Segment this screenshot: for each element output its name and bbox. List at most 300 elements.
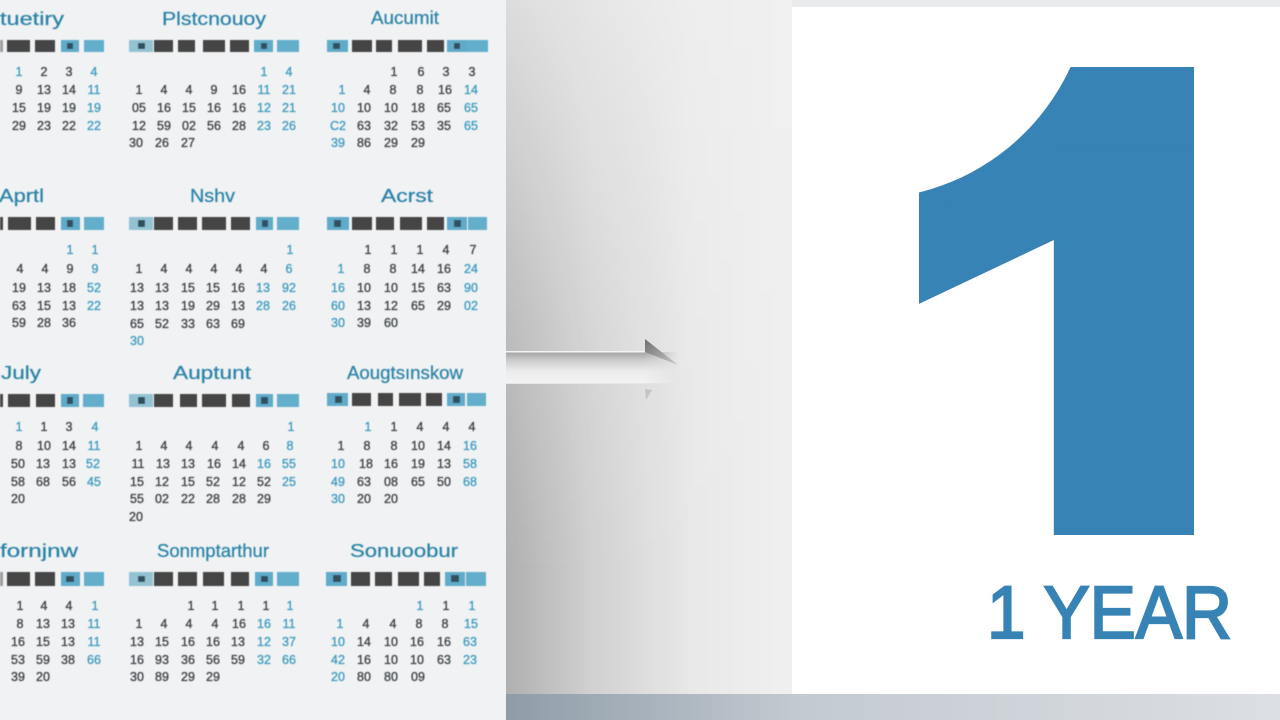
month: row 3 column 1: 1 xyxy=(41,420,48,434)
month: row 4 column 2: 29 xyxy=(181,670,195,684)
month: row 1 column 3: 39 xyxy=(331,136,345,150)
month: row 2 column 2: 4 xyxy=(211,262,218,276)
month: row 1 column 2: 26 xyxy=(282,119,296,133)
month: row 3 column 1: 8 xyxy=(16,439,23,453)
month: row 2 column 3: 10 xyxy=(357,281,371,295)
month: row 3 column 1: 10 xyxy=(37,439,51,453)
month: row 3 column 2: 16 xyxy=(207,457,221,471)
month: row 4 column 3: 4 xyxy=(363,617,370,631)
month: row 1 column 3: 32 xyxy=(384,119,398,133)
month: row 4 column 2: 1 xyxy=(287,599,294,613)
month: row 3 column 3: 8 xyxy=(364,439,371,453)
month: row 1 column 3: 18 xyxy=(411,101,425,115)
month: row 1 column 3: 3 xyxy=(469,65,476,79)
panel: floor strip xyxy=(506,694,1280,720)
month: row 4 column 1: 15 xyxy=(36,635,50,649)
month: row 2 column 1: 9 xyxy=(67,262,74,276)
month: row 1 column 1: 1 xyxy=(16,65,23,79)
month: row 4 column 2 xyxy=(129,541,299,684)
month: row 4 column 2: 36 xyxy=(181,653,195,667)
month: row 2 column 3: 14 xyxy=(411,262,425,276)
month: row 3 column 3: 20 xyxy=(357,492,371,506)
month: row 1 column 1: 19 xyxy=(37,101,51,115)
month: row 2 column 2: 15 xyxy=(206,281,220,295)
month: row 4 column 2: 1 xyxy=(212,599,219,613)
month: row 2 column 3: 13 xyxy=(357,299,371,313)
month: row 2 column 1: 13 xyxy=(62,299,76,313)
month: row 2 column 2: 13 xyxy=(256,281,270,295)
month: row 1 column 1: 29 xyxy=(12,119,26,133)
month: row 2 column 2: 4 xyxy=(236,262,243,276)
month: row 4 column 3: 20 xyxy=(331,670,345,684)
month: row 4 column 2: 1 xyxy=(238,599,245,613)
month: row 1 column 1: 15 xyxy=(12,101,26,115)
month: row 2 column 3: 4 xyxy=(443,243,450,257)
month: row 3 column 3: 30 xyxy=(331,492,345,506)
month: row 4 column 2: 4 xyxy=(186,617,193,631)
month: row 4 column 1: 11 xyxy=(88,617,101,631)
month: row 4 column 1: 4 xyxy=(41,599,48,613)
month: row 4 column 2: 93 xyxy=(155,653,169,667)
month: row 4 column 2: 32 xyxy=(257,653,271,667)
month: row 1 column 3: 35 xyxy=(437,119,451,133)
month: row 4 column 2: 37 xyxy=(282,635,296,649)
month: row 1 column 1: 3 xyxy=(66,65,73,79)
month: row 2 column 2: 13 xyxy=(155,299,169,313)
month: row 1 column 3: 63 xyxy=(357,119,371,133)
month: row 4 column 2: 13 xyxy=(231,635,245,649)
month: row 1 column 2: 12 xyxy=(132,119,146,133)
month: row 1 column 2: 16 xyxy=(232,101,246,115)
month: row 2 column 3: 1 xyxy=(338,262,345,276)
month: row 4 column 2: 15 xyxy=(155,635,169,649)
month: row 1 column 2: 16 xyxy=(157,101,171,115)
month: row 1 column 2: 23 xyxy=(257,119,271,133)
month: row 2 column 3: 65 xyxy=(411,299,425,313)
month: row 2 column 2: 4 xyxy=(161,262,168,276)
month: row 4 column 1: 4 xyxy=(66,599,73,613)
month: row 1 column 3: 53 xyxy=(411,119,425,133)
month: row 4 column 3: 10 xyxy=(331,635,345,649)
month: row 2 column 3: 63 xyxy=(437,281,451,295)
month: row 4 column 1: 13 xyxy=(61,617,75,631)
month: row 1 column 2: 16 xyxy=(232,83,246,97)
month: row 1 column 3: 1 xyxy=(339,83,346,97)
month: row 1 column 1: 23 xyxy=(37,119,51,133)
month: row 4 column 3: 80 xyxy=(357,670,371,684)
month: row 3 column 3: Aougtsınskow xyxy=(347,363,464,383)
month: row 1 column 1: 13 xyxy=(37,83,51,97)
month: row 1 column 1: 22 xyxy=(62,119,76,133)
month: row 3 column 1: 13 xyxy=(36,457,50,471)
month: row 2 column 2: 19 xyxy=(181,299,195,313)
month: row 3 column 2: 20 xyxy=(129,510,143,524)
month: row 1 column 2: 21 xyxy=(282,101,296,115)
month: row 4 column 2: 16 xyxy=(181,635,195,649)
month: row 3 column 3: 4 xyxy=(417,420,424,434)
month: row 1 column 2: 21 xyxy=(282,83,296,97)
month: row 3 column 2: 8 xyxy=(287,439,294,453)
month: row 4 column 1: fornjnw xyxy=(0,541,79,561)
month: row 3 column 2: 25 xyxy=(282,475,296,489)
month: row 3 column 3: 4 xyxy=(443,420,450,434)
month: row 3 column 1: 11 xyxy=(88,439,101,453)
month: row 1 column 3: 65 xyxy=(437,101,451,115)
month: row 4 column 3: 16 xyxy=(357,653,371,667)
month: row 1 column 3: 65 xyxy=(464,101,478,115)
month: row 4 column 2: 30 xyxy=(130,670,144,684)
month: row 4 column 2: 1 xyxy=(136,617,143,631)
month: row 1 column 3: 65 xyxy=(464,119,478,133)
month: row 1 column 2: 16 xyxy=(207,101,221,115)
month: row 1 column 2: 1 xyxy=(261,65,268,79)
month: row 3 column 3: 10 xyxy=(411,439,425,453)
month: row 2 column 1: 63 xyxy=(12,299,26,313)
month: row 4 column 3: 09 xyxy=(411,670,425,684)
month: row 3 column 2: 12 xyxy=(155,475,169,489)
month: row 2 column 3: 02 xyxy=(464,299,478,313)
month: row 3 column 2: 15 xyxy=(130,475,144,489)
month: row 1 column 2: 30 xyxy=(129,136,143,150)
month: row 1 column 2: 4 xyxy=(161,83,168,97)
month: row 4 column 2: 1 xyxy=(188,599,195,613)
month: row 3 column 2: 55 xyxy=(282,457,296,471)
month: row 2 column 3: 16 xyxy=(331,281,345,295)
month: row 1 column 2: 59 xyxy=(157,119,171,133)
month: row 3 column 1: 20 xyxy=(11,492,25,506)
month: row 2 column 3: 12 xyxy=(384,299,398,313)
month: row 1 column 2: 4 xyxy=(286,65,293,79)
month: row 2 column 2: Nshv xyxy=(190,186,235,206)
month: row 3 column 2: 1 xyxy=(288,420,295,434)
month: row 3 column 1: 50 xyxy=(11,457,25,471)
month: row 3 column 1: 68 xyxy=(36,475,50,489)
month: row 2 column 3: 1 xyxy=(391,243,398,257)
month: row 2 column 1: 22 xyxy=(87,299,101,313)
month: row 4 column 3: 10 xyxy=(410,653,424,667)
month: row 4 column 3: 15 xyxy=(464,617,478,631)
month: row 2 column 1: 4 xyxy=(17,262,24,276)
month: row 4 column 2: 16 xyxy=(130,653,144,667)
month: row 3 column 3: 10 xyxy=(331,457,345,471)
panel: calendar sheet xyxy=(0,0,506,720)
month: row 1 column 1: 22 xyxy=(87,119,101,133)
month: row 2 column 3 xyxy=(327,186,487,330)
month: row 4 column 3: Sonuoobur xyxy=(350,541,458,561)
month: row 3 column 2: 12 xyxy=(232,475,246,489)
month: row 2 column 3: 8 xyxy=(364,262,371,276)
month: row 4 column 1: 53 xyxy=(11,653,25,667)
month: row 1 column 3: 10 xyxy=(331,101,345,115)
month: row 2 column 2: 69 xyxy=(231,317,245,331)
month: row 2 column 1: 36 xyxy=(62,316,76,330)
month: row 4 column 1: 13 xyxy=(36,617,50,631)
month: row 2 column 2: 4 xyxy=(186,262,193,276)
month: row 4 column 1: 20 xyxy=(36,670,50,684)
month: row 1 column 3: 10 xyxy=(357,101,371,115)
month: row 3 column 1 xyxy=(0,363,104,506)
month: row 3 column 1: 4 xyxy=(92,420,99,434)
month: row 3 column 1: 1 xyxy=(16,420,23,434)
month: row 1 column 3: 86 xyxy=(357,136,371,150)
month: row 1 column 2: 02 xyxy=(182,119,196,133)
month: row 2 column 2: 28 xyxy=(256,299,270,313)
month: row 1 column 2: 12 xyxy=(257,101,271,115)
month: row 4 column 3: 4 xyxy=(390,617,397,631)
month: row 1 column 3: 3 xyxy=(443,65,450,79)
month: row 3 column 3: 8 xyxy=(391,439,398,453)
month: row 3 column 2: 14 xyxy=(232,457,246,471)
month: row 1 column 3: Aucumit xyxy=(371,8,439,28)
month: row 4 column 3: 8 xyxy=(416,617,423,631)
month: row 3 column 2: 52 xyxy=(206,475,220,489)
month: row 4 column 3 xyxy=(326,541,486,684)
month: row 1 column 1: 9 xyxy=(16,83,23,97)
month: row 2 column 1: Aprtl xyxy=(0,186,44,206)
month: row 2 column 1: 13 xyxy=(37,281,51,295)
month: row 4 column 3: 63 xyxy=(437,653,451,667)
month: row 4 column 2: 16 xyxy=(206,635,220,649)
month: row 1 column 1: 11 xyxy=(88,83,101,97)
month: row 1 column 2: 28 xyxy=(232,119,246,133)
month: row 4 column 3: 16 xyxy=(437,635,451,649)
month: row 2 column 2: 16 xyxy=(231,281,245,295)
month: row 4 column 1: 1 xyxy=(17,599,24,613)
label: 1 YEAR: 1 YEAR xyxy=(987,571,1232,654)
month: row 4 column 3: 14 xyxy=(357,635,371,649)
month: row 2 column 3: 16 xyxy=(437,262,451,276)
month: row 1 column 3: 8 xyxy=(390,83,397,97)
month: row 4 column 1: 59 xyxy=(36,653,50,667)
month: row 3 column 2: 13 xyxy=(156,457,170,471)
month: row 1 column 3: 6 xyxy=(418,65,425,79)
month: row 1 column 1 xyxy=(0,9,104,133)
month: row 3 column 3: 16 xyxy=(463,439,477,453)
month: row 4 column 2: 66 xyxy=(282,653,296,667)
month: row 4 column 1: 38 xyxy=(61,653,75,667)
month: row 3 column 2: 16 xyxy=(257,457,271,471)
month: row 3 column 3: 18 xyxy=(359,457,373,471)
month: row 4 column 1: 11 xyxy=(88,635,101,649)
month: row 3 column 3: 63 xyxy=(357,475,371,489)
month: row 4 column 2: 16 xyxy=(232,617,246,631)
month: row 1 column 3: 8 xyxy=(417,83,424,97)
month: row 3 column 2: 29 xyxy=(257,492,271,506)
month: row 1 column 2: 27 xyxy=(181,136,195,150)
month: row 1 column 2: 4 xyxy=(186,83,193,97)
month: row 1 column 2 xyxy=(129,9,299,150)
month: row 3 column 1: July xyxy=(1,363,41,383)
month: row 2 column 3: 30 xyxy=(331,316,345,330)
month: row 3 column 2: 4 xyxy=(161,439,168,453)
month: row 2 column 1: 18 xyxy=(62,281,76,295)
month: row 1 column 2: 56 xyxy=(207,119,221,133)
month: row 3 column 2 xyxy=(129,363,299,524)
month: row 2 column 3: 24 xyxy=(464,262,478,276)
month: row 3 column 2: 28 xyxy=(206,492,220,506)
month: row 2 column 2: 4 xyxy=(261,262,268,276)
month: row 4 column 2: 29 xyxy=(206,670,220,684)
month: row 4 column 1 xyxy=(0,541,104,684)
month: row 1 column 3: 29 xyxy=(411,136,425,150)
month: row 3 column 1: 52 xyxy=(86,457,100,471)
month: row 3 column 1: 56 xyxy=(62,475,76,489)
month: row 1 column 2: 26 xyxy=(155,136,169,150)
month: row 4 column 3: 10 xyxy=(384,635,398,649)
month: row 4 column 2: 13 xyxy=(130,635,144,649)
month: row 2 column 3: 1 xyxy=(365,243,372,257)
month: row 2 column 3: 29 xyxy=(437,299,451,313)
month: row 2 column 3: 90 xyxy=(464,281,478,295)
month: row 4 column 1: 39 xyxy=(11,670,25,684)
month: row 2 column 3: 60 xyxy=(384,316,398,330)
month: row 4 column 2: 16 xyxy=(257,617,271,631)
month: row 2 column 2: 15 xyxy=(181,281,195,295)
month: row 1 column 3: 1 xyxy=(391,65,398,79)
month: row 1 column 2: 05 xyxy=(132,101,146,115)
month: row 4 column 1: 13 xyxy=(61,635,75,649)
month: row 3 column 3: 1 xyxy=(391,420,398,434)
month: row 2 column 1: 52 xyxy=(87,281,101,295)
month: row 3 column 2: 15 xyxy=(181,475,195,489)
month: row 4 column 3: 1 xyxy=(417,599,424,613)
month: row 3 column 1: 14 xyxy=(62,439,76,453)
month: row 4 column 2: 1 xyxy=(263,599,270,613)
month: row 2 column 3: 1 xyxy=(417,243,424,257)
month: row 4 column 3: 42 xyxy=(331,653,345,667)
month: row 2 column 2 xyxy=(129,186,299,348)
month: row 3 column 3: 49 xyxy=(331,475,345,489)
month: row 1 column 2: 11 xyxy=(258,83,271,97)
month: row 2 column 3: Acrst xyxy=(381,186,433,206)
month: row 3 column 2: 11 xyxy=(132,457,145,471)
month: row 2 column 2: 26 xyxy=(282,299,296,313)
month: row 3 column 3: 50 xyxy=(437,475,451,489)
month: row 1 column 3: 14 xyxy=(464,83,478,97)
month: row 3 column 2: 4 xyxy=(186,439,193,453)
month: row 3 column 3: 65 xyxy=(411,475,425,489)
month: row 4 column 3: 1 xyxy=(337,617,344,631)
month: row 3 column 2: 28 xyxy=(232,492,246,506)
month: row 4 column 3: 1 xyxy=(469,599,476,613)
month: row 3 column 3: 1 xyxy=(338,439,345,453)
month: row 4 column 2: 4 xyxy=(212,617,219,631)
month: row 3 column 3: 14 xyxy=(437,439,451,453)
month: row 1 column 2: Plstcnouoy xyxy=(162,9,266,29)
month: row 4 column 2: 59 xyxy=(231,653,245,667)
month: row 1 column 1: 2 xyxy=(41,65,48,79)
month: row 3 column 3: 4 xyxy=(469,420,476,434)
month: row 2 column 3: 7 xyxy=(470,243,477,257)
month: row 1 column 1: 14 xyxy=(62,83,76,97)
month: row 2 column 3: 15 xyxy=(411,281,425,295)
month: row 3 column 2: 1 xyxy=(136,439,143,453)
month: row 1 column 1: tuetiry xyxy=(0,9,64,29)
month: row 4 column 3: 16 xyxy=(410,635,424,649)
panel: side wall background xyxy=(506,0,720,694)
month: row 4 column 3: 1 xyxy=(443,599,450,613)
month: row 2 column 2: 29 xyxy=(206,299,220,313)
month: row 1 column 2: 9 xyxy=(211,83,218,97)
month: row 2 column 1: 9 xyxy=(92,262,99,276)
month: row 2 column 1: 1 xyxy=(67,243,74,257)
month: row 2 column 2: 33 xyxy=(181,317,195,331)
month: row 3 column 3: 58 xyxy=(463,457,477,471)
month: row 2 column 2: 13 xyxy=(155,281,169,295)
month: row 3 column 3: 13 xyxy=(437,457,451,471)
month: row 3 column 1: 13 xyxy=(62,457,76,471)
month: row 4 column 3: 10 xyxy=(384,653,398,667)
month: row 3 column 2: Auptunt xyxy=(173,363,251,383)
month: row 1 column 3: 4 xyxy=(364,83,371,97)
month: row 3 column 2: 6 xyxy=(263,439,270,453)
arrow pointing from calendar to year card xyxy=(506,339,678,400)
month: row 2 column 2: 13 xyxy=(130,281,144,295)
month: row 2 column 2: 1 xyxy=(287,243,294,257)
month: row 3 column 3 xyxy=(327,363,486,506)
month: row 3 column 1: 3 xyxy=(66,420,73,434)
month: row 2 column 1: 1 xyxy=(92,243,99,257)
month: row 3 column 2: 52 xyxy=(257,475,271,489)
month: row 4 column 1: 1 xyxy=(92,599,99,613)
month: row 2 column 1: 19 xyxy=(12,281,26,295)
month: row 4 column 3: 8 xyxy=(442,617,449,631)
month: row 2 column 3: 60 xyxy=(331,299,345,313)
month: row 3 column 3: 1 xyxy=(365,420,372,434)
month: row 2 column 1: 59 xyxy=(12,316,26,330)
month: row 4 column 2: 56 xyxy=(206,653,220,667)
month: row 4 column 2: 12 xyxy=(257,635,271,649)
month: row 1 column 3 xyxy=(327,8,488,150)
month: row 4 column 1: 66 xyxy=(87,653,101,667)
month: row 3 column 3: 16 xyxy=(384,457,398,471)
month: row 2 column 1 xyxy=(0,186,104,330)
month: row 3 column 2: 4 xyxy=(238,439,245,453)
month: row 2 column 2: 1 xyxy=(136,262,143,276)
month: row 1 column 3: 29 xyxy=(384,136,398,150)
month: row 2 column 2: 52 xyxy=(155,317,169,331)
month: row 3 column 3: 68 xyxy=(463,475,477,489)
month: row 4 column 3: 63 xyxy=(463,635,477,649)
month: row 4 column 1: 8 xyxy=(17,617,24,631)
month: row 4 column 3: 23 xyxy=(463,653,477,667)
month: row 4 column 1: 16 xyxy=(11,635,25,649)
month: row 2 column 2: 13 xyxy=(231,299,245,313)
month: row 3 column 3: 20 xyxy=(384,492,398,506)
month: row 3 column 1: 58 xyxy=(11,475,25,489)
month: row 1 column 2: 15 xyxy=(182,101,196,115)
month: row 2 column 1: 15 xyxy=(37,299,51,313)
month: row 1 column 3: 10 xyxy=(384,101,398,115)
month: row 1 column 1: 4 xyxy=(91,65,98,79)
month: row 3 column 2: 22 xyxy=(181,492,195,506)
month: row 2 column 3: 10 xyxy=(384,281,398,295)
month: row 4 column 2: 4 xyxy=(161,617,168,631)
month: row 3 column 1: 45 xyxy=(87,475,101,489)
month: row 3 column 2: 55 xyxy=(130,492,144,506)
month: row 2 column 3: 39 xyxy=(357,316,371,330)
month: row 2 column 2: 6 xyxy=(286,262,293,276)
month: row 1 column 1: 19 xyxy=(62,101,76,115)
month: row 2 column 1: 28 xyxy=(37,316,51,330)
month: row 1 column 1: 19 xyxy=(87,101,101,115)
month: row 1 column 3: C2 xyxy=(330,119,346,133)
month: row 3 column 2: 13 xyxy=(181,457,195,471)
calendar months xyxy=(0,8,488,684)
month: row 1 column 2: 1 xyxy=(136,83,143,97)
month: row 3 column 2: 02 xyxy=(155,492,169,506)
month: row 2 column 3: 8 xyxy=(390,262,397,276)
